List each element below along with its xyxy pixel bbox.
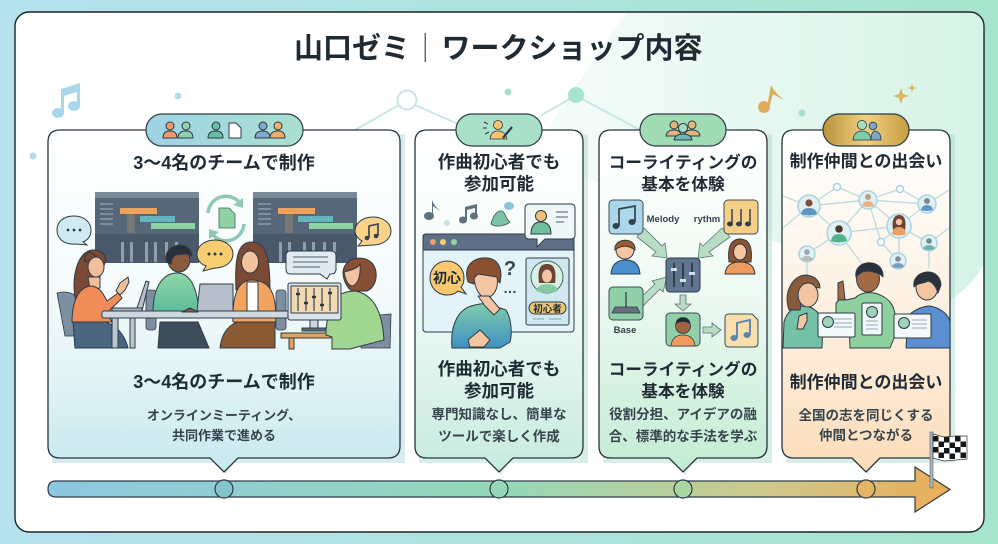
center man (836, 293, 896, 348)
speech bubbles (57, 216, 391, 279)
left woman (783, 306, 823, 348)
beginner profile card (526, 258, 569, 325)
bubble: shoshin (430, 261, 466, 295)
right man (906, 306, 950, 348)
title (294, 32, 703, 65)
mixer (666, 258, 700, 292)
question mark and dots: ? (504, 258, 516, 280)
rhythm: rythm (694, 214, 720, 225)
description: 全国の志を同じくする (798, 407, 934, 423)
person 4 at desk with mixer screen (281, 258, 384, 349)
heading: 基本を体験 (641, 175, 725, 194)
description (147, 408, 301, 443)
timeline arrow (48, 467, 950, 512)
heading repeated: 基本を体験 (641, 382, 725, 401)
description: 共同作業で進める (172, 428, 276, 443)
thinking person (452, 258, 511, 348)
heading: 参加可能 (464, 174, 534, 194)
illustration: remote team around a table (57, 192, 391, 349)
heading: 作曲初心者でも (438, 152, 560, 172)
pill: team icons (146, 114, 303, 146)
pill: group icon (640, 114, 726, 146)
description: ツールで楽しく作成 (438, 428, 560, 444)
icon: sparkles (893, 83, 917, 104)
pill: composer icon (456, 114, 542, 146)
description: 合、標準的な手法を学ぶ (609, 428, 758, 444)
person 3 (220, 242, 276, 348)
heading repeated: コーライティングの (609, 359, 757, 379)
three people holding profile cards (783, 263, 950, 348)
DAW monitor left (95, 192, 199, 263)
description (798, 407, 934, 443)
avatar (666, 313, 700, 346)
table and laptops (102, 281, 292, 348)
question mark and dots: … (503, 280, 517, 296)
network of peers (783, 184, 949, 280)
description: オンラインミーティング、 (147, 408, 301, 423)
person 1 (72, 250, 129, 348)
finished song (725, 314, 758, 347)
illustration: beginner at browser window (423, 200, 575, 348)
arrows (637, 228, 730, 337)
DAW monitor right (253, 192, 357, 263)
description: 専門知識なし、簡単な (432, 406, 566, 422)
person: melody (611, 240, 640, 274)
icon: gold music note (758, 85, 784, 113)
user card bubble (525, 204, 575, 247)
description (432, 406, 566, 444)
heading: 制作仲間との出会い (790, 152, 942, 171)
heading repeated: 作曲初心者でも (438, 359, 560, 379)
icon: sync document (208, 196, 244, 241)
heading repeated (438, 359, 560, 401)
melody: Melody (647, 214, 680, 225)
description (609, 406, 758, 444)
base (609, 287, 643, 336)
heading repeated (609, 359, 757, 401)
heading repeated: 参加可能 (464, 381, 534, 401)
icon: blue music note (52, 83, 80, 118)
pill: gold peers icon (823, 114, 909, 146)
title: 山口ゼミ (294, 32, 410, 65)
background network decoration (30, 87, 806, 160)
heading repeated: 3〜4名のチームで制作 (133, 372, 315, 392)
icon: checkered finish flag (930, 432, 967, 488)
heading (609, 152, 757, 194)
description: 役割分担、アイデアの融 (609, 406, 757, 422)
question mark and dots (503, 258, 517, 296)
profile cards (818, 313, 855, 337)
panel: co-writing basics (599, 114, 772, 475)
heading (438, 152, 560, 194)
heading: 3〜4名のチームで制作 (133, 153, 315, 173)
beginner profile card: 初心者 (533, 303, 562, 315)
heading: コーライティングの (609, 152, 757, 172)
bubble: shoshin: 初心 (433, 270, 461, 286)
heading repeated: 制作仲間との出会い (790, 373, 942, 392)
person: rhythm (725, 239, 755, 274)
description: 仲間とつながる (819, 427, 913, 443)
person 2 (153, 245, 209, 348)
title: ワークショップ内容 (441, 32, 703, 65)
base: Base (614, 325, 636, 336)
panel: meeting peers (782, 114, 955, 475)
rhythm (694, 200, 758, 234)
melody (609, 200, 680, 234)
panel: team production (48, 114, 405, 475)
panel: beginner friendly (415, 114, 588, 475)
timeline markers (215, 480, 875, 498)
chairs (57, 290, 391, 348)
diagram: co-writing flow (609, 200, 758, 347)
